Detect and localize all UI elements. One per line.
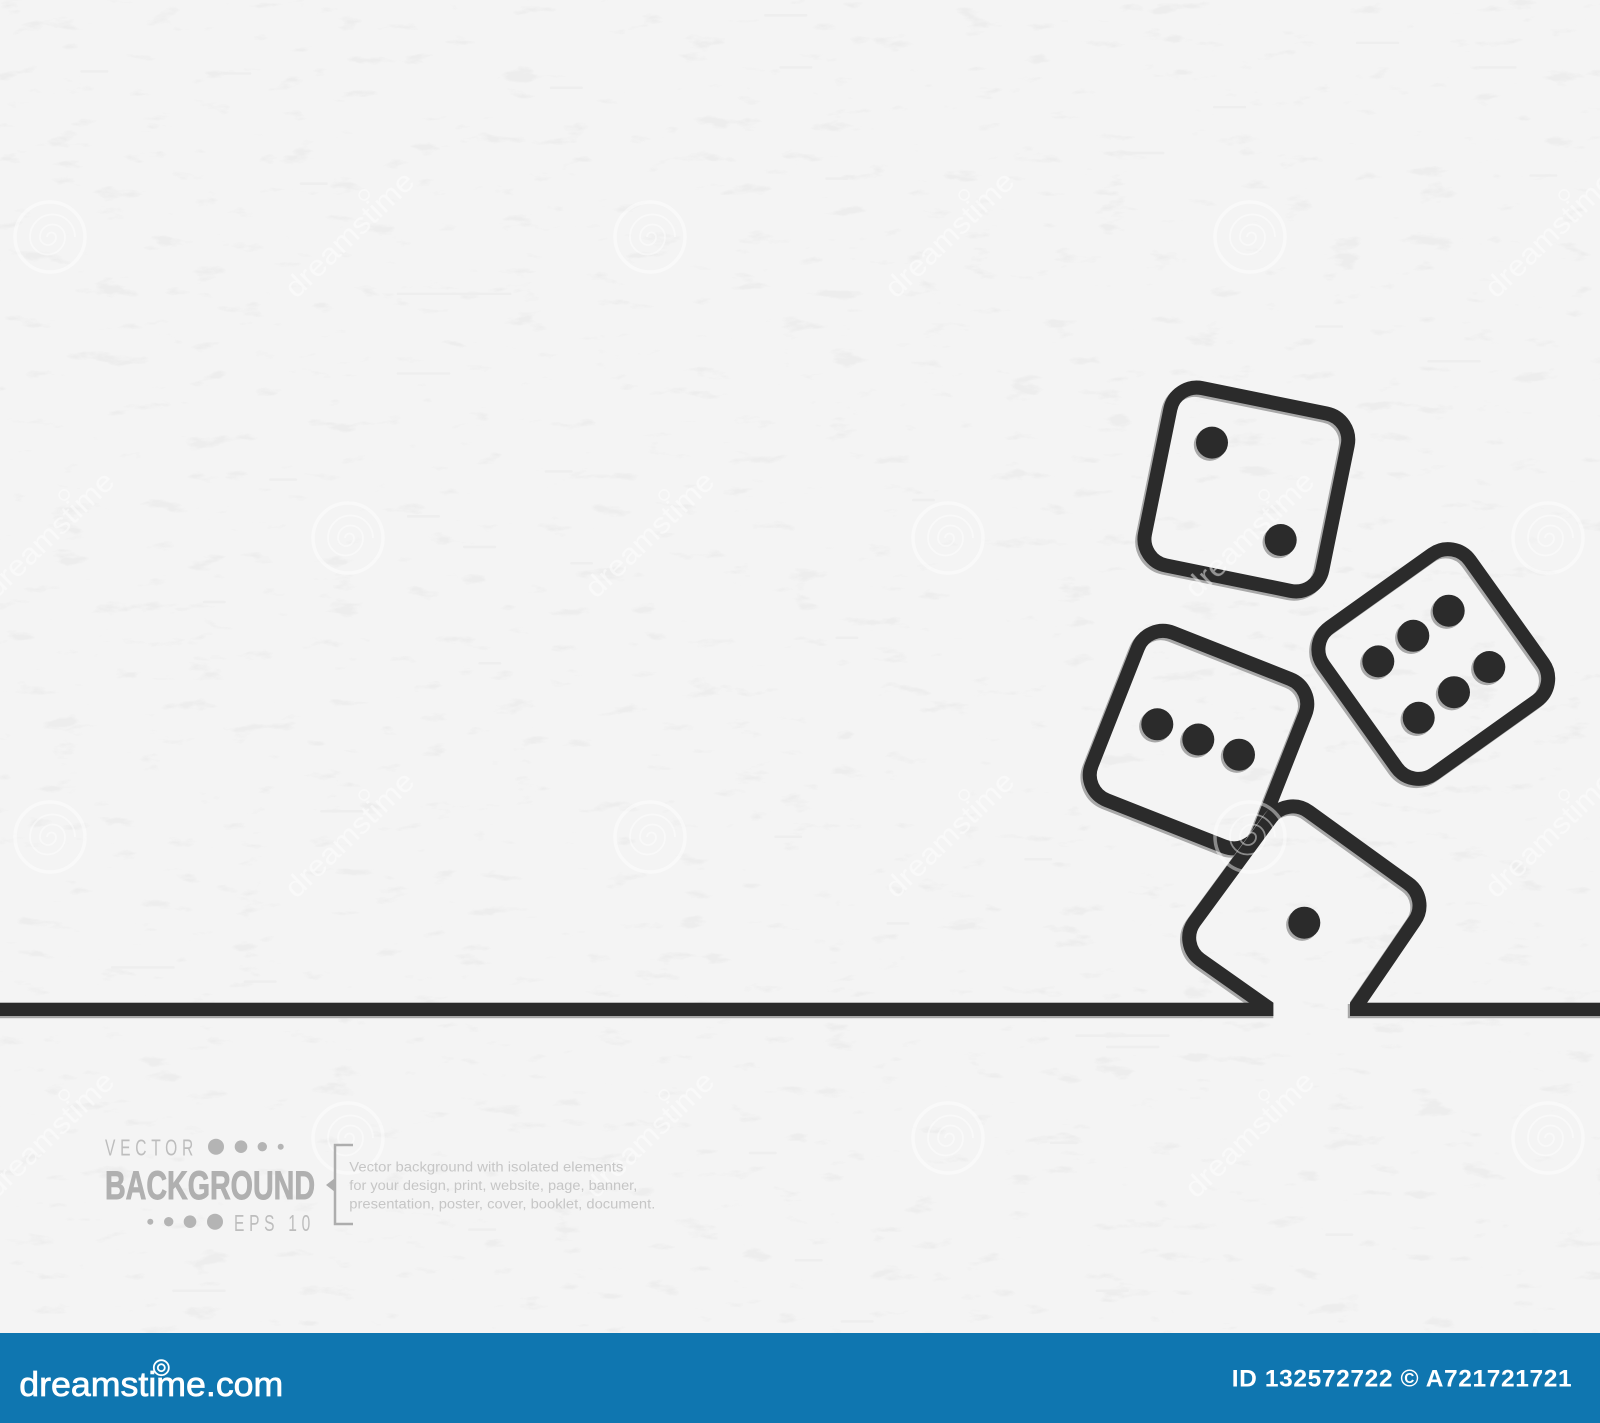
decorative dots, bottom row — [147, 1214, 223, 1230]
die showing one, open at the bottom and joined to the ground line — [1187, 806, 1419, 1032]
decorative dots, top row — [208, 1139, 284, 1155]
icon: spiral — [154, 1360, 169, 1375]
footer logo: dreamstime.com — [19, 1366, 283, 1404]
ground line — [0, 1003, 1600, 1018]
heading: eps 10: EPS 10 — [234, 1210, 315, 1236]
footer bar — [0, 1333, 1600, 1423]
description text — [349, 1160, 655, 1211]
watermark pattern — [0, 160, 1600, 1205]
description text: for your design, print, website, page, banner, — [349, 1178, 637, 1193]
die showing three — [1080, 623, 1315, 859]
bracket with pointer — [326, 1145, 353, 1224]
description text: Vector background with isolated elements — [349, 1160, 624, 1175]
vector background logo block — [105, 1135, 655, 1236]
description text: presentation, poster, cover, booklet, document. — [349, 1196, 655, 1211]
die showing six — [1306, 538, 1559, 792]
heading: vector: VECTOR — [105, 1135, 198, 1161]
die showing two — [1137, 383, 1353, 598]
image id and author: ID 132572722 © A721721721 — [1232, 1366, 1572, 1393]
heading: background: BACKGROUND — [105, 1164, 315, 1208]
